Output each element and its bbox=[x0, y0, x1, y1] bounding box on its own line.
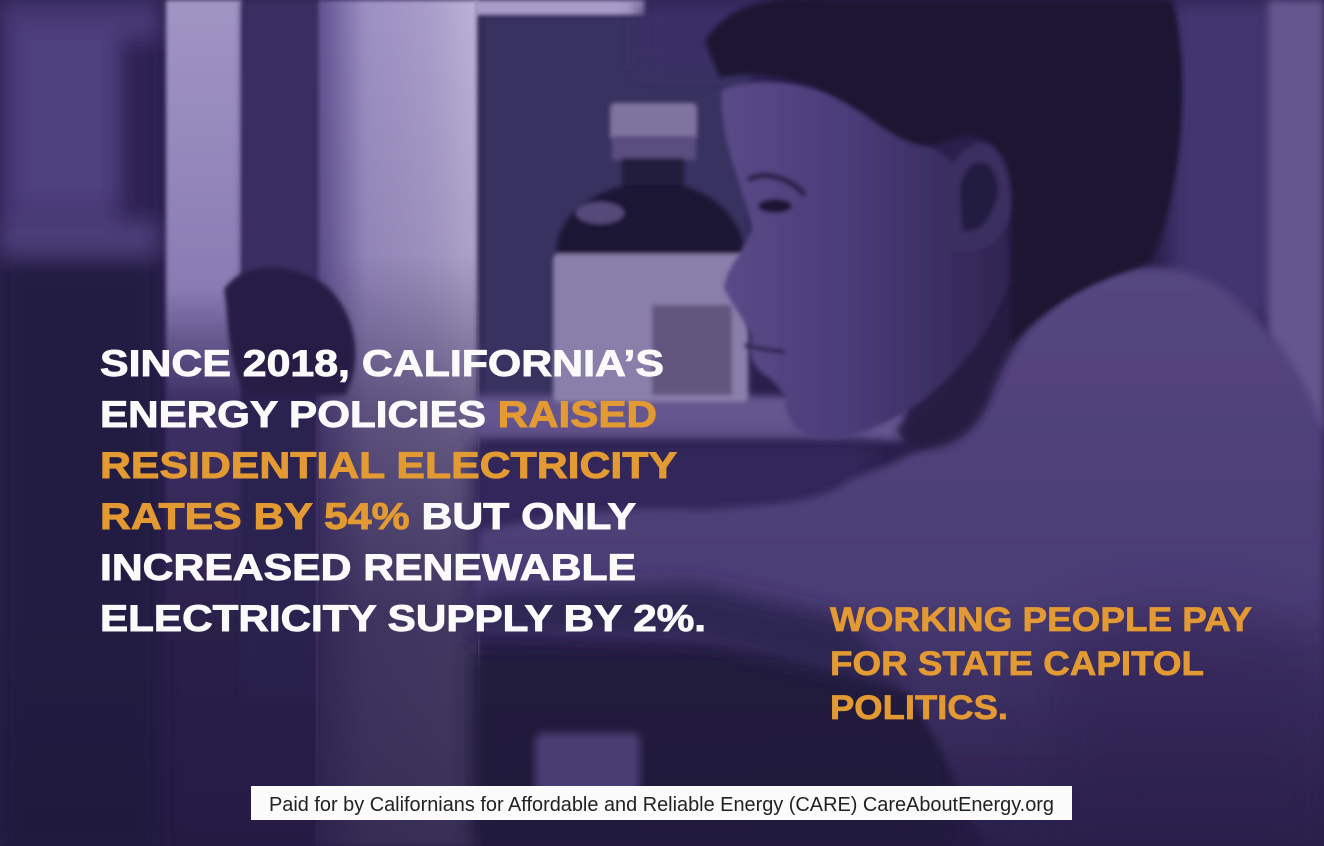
fridge interior bbox=[480, 14, 750, 404]
headline line 6: ELECTRICITY SUPPLY BY 2%. bbox=[100, 598, 706, 639]
headline line 1: SINCE 2018, CALIFORNIA’S bbox=[100, 343, 664, 384]
orange tagline: FOR STATE CAPITOL bbox=[830, 645, 1204, 683]
orange tagline: POLITICS. bbox=[830, 689, 1008, 727]
headline text block bbox=[100, 343, 706, 639]
bottle bbox=[553, 103, 748, 402]
headline line 4: RATES BY 54% BUT ONLY bbox=[100, 496, 636, 537]
bright central column bbox=[318, 0, 478, 846]
right wall bbox=[1170, 0, 1275, 320]
overall lower darkening bbox=[0, 600, 1324, 846]
headline line 2: ENERGY POLICIES RAISED bbox=[100, 394, 657, 435]
paid-for-by disclaimer bar: Paid for by Californians for Affordable and Reliable Energy (CARE) CareAboutEnergy.org bbox=[269, 794, 1054, 816]
hand on door bbox=[224, 268, 355, 395]
fridge door shelves, left bbox=[0, 0, 160, 846]
orange tagline bbox=[830, 601, 1252, 727]
door edge strip bbox=[166, 0, 242, 640]
headline line 5: INCREASED RENEWABLE bbox=[100, 547, 636, 588]
shelf bbox=[475, 396, 905, 440]
arm shadow bbox=[470, 585, 905, 690]
face bbox=[722, 82, 1015, 439]
paid-for-by disclaimer bar bbox=[251, 786, 1072, 820]
bottom jar bbox=[535, 733, 640, 793]
hair bbox=[705, 0, 1182, 345]
sweater and arm bbox=[470, 267, 1324, 846]
neck and collar bbox=[895, 270, 1060, 450]
lower torso shadow bbox=[1040, 606, 1324, 846]
headline line 3: RESIDENTIAL ELECTRICITY bbox=[100, 445, 677, 486]
orange tagline: WORKING PEOPLE PAY bbox=[830, 601, 1252, 639]
